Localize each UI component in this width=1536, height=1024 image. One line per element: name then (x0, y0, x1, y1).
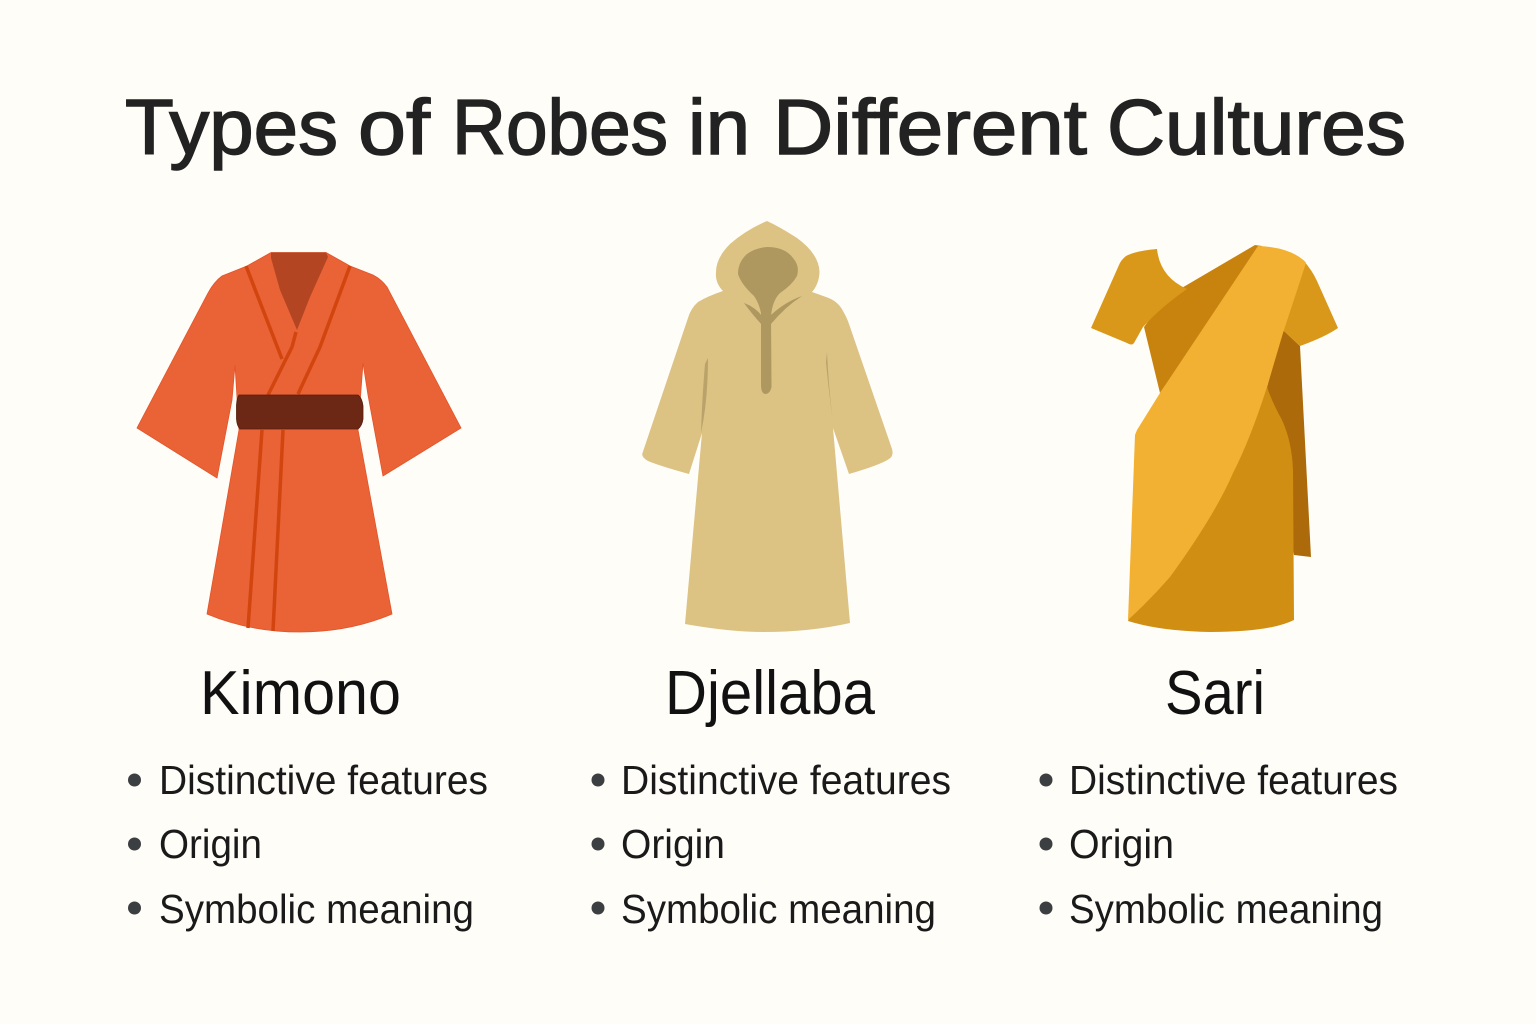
title: Cultures (1107, 83, 1406, 171)
icon: kimono robe (137, 252, 461, 632)
list: kimono points (128, 757, 488, 932)
panel: kimono (128, 252, 488, 932)
list: kimono points: Distinctive features (159, 757, 488, 803)
list: djellaba points: Distinctive features (621, 757, 951, 803)
icon: sari garment (1091, 245, 1338, 632)
list: sari points: Distinctive features (1069, 757, 1398, 803)
title: of (358, 83, 430, 171)
list: sari points (1040, 757, 1398, 932)
icon: djellaba robe (642, 221, 893, 632)
heading: Kimono: Kimono (200, 659, 401, 728)
panel: djellaba (592, 221, 951, 932)
list: djellaba points: Symbolic meaning (621, 886, 936, 932)
list: kimono points: Symbolic meaning (159, 886, 474, 932)
heading: Sari: Sari (1165, 659, 1265, 728)
title: Robes (452, 83, 668, 171)
list: djellaba points: Origin (621, 821, 725, 867)
list: kimono points: Origin (159, 821, 262, 867)
panel: sari (1040, 245, 1398, 932)
title: Different (773, 83, 1087, 171)
heading: Djellaba: Djellaba (665, 659, 875, 728)
list: sari points: Symbolic meaning (1069, 886, 1383, 932)
list: djellaba points (592, 757, 951, 932)
title: Types (125, 83, 338, 171)
list: sari points: Origin (1069, 821, 1174, 867)
title: in (688, 83, 750, 171)
